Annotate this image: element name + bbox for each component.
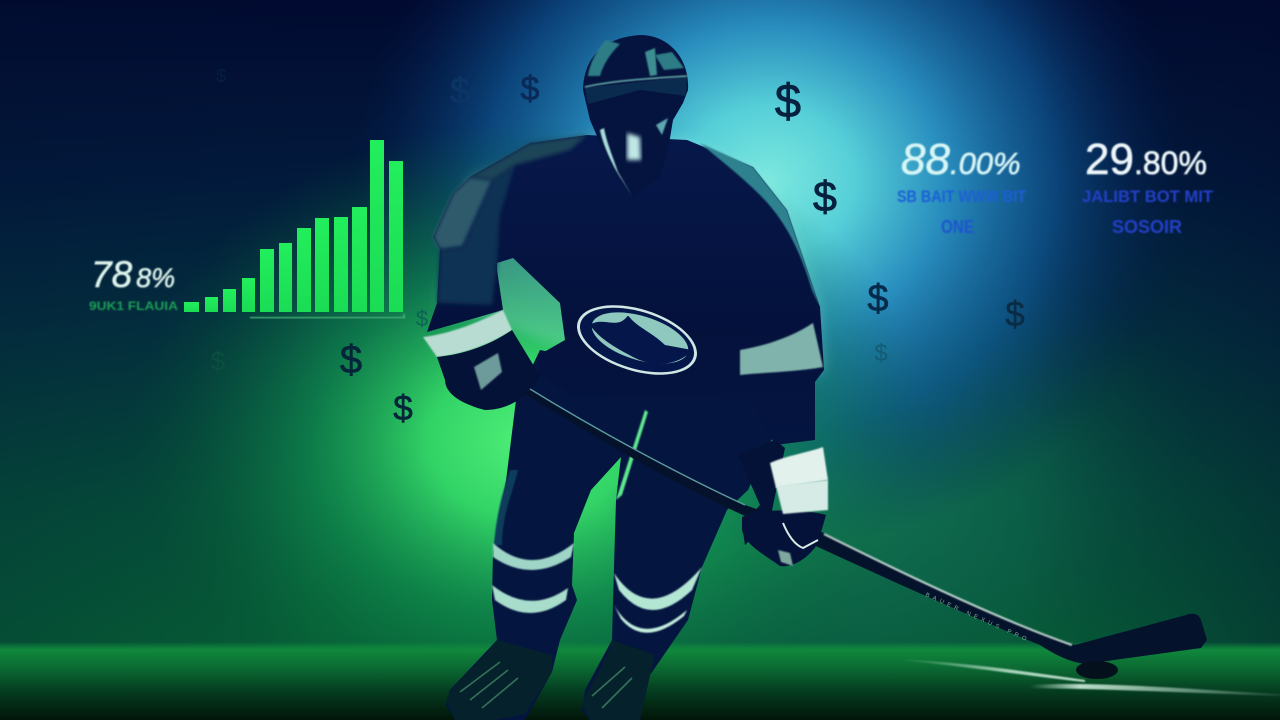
left sleeve highlight: [433, 177, 493, 250]
floating dollar signs: $: [775, 74, 801, 127]
right leg sock stripes: [614, 567, 702, 610]
right sleeve cuff stripe: [740, 323, 823, 375]
floating dollar signs: $: [450, 70, 470, 111]
shoulder strip: [470, 135, 587, 180]
right statistic: 88.00%: ONE: [941, 217, 974, 237]
jersey crest: [569, 292, 705, 388]
face highlights: [627, 133, 641, 160]
bar chart: rising green bars: [184, 140, 404, 318]
left leg sock stripes: [493, 543, 574, 570]
ice floor: [0, 642, 1280, 720]
hockey player: [423, 35, 825, 720]
hockey stick and puck: [525, 389, 1207, 679]
right statistic: 29.80%: JALIBT BOT MIT: [1082, 187, 1214, 206]
skates: [446, 640, 552, 720]
player legs: [446, 350, 790, 720]
left statistic: 9UK1 FLAUIA: [89, 299, 178, 313]
floating dollar signs: $: [340, 338, 362, 382]
right shoulder rim: [700, 143, 820, 307]
floating dollar signs: $: [211, 346, 226, 376]
hockey stick and puck: BAUER NEXUS PRO: [924, 592, 1027, 643]
right statistic: 88.00%: 88.00%: [901, 135, 1021, 184]
left statistic: [89, 254, 178, 313]
helmet and head: [583, 35, 688, 197]
floating dollar signs: $: [813, 173, 837, 221]
right statistic: 88.00%: [897, 135, 1027, 237]
floating dollar signs: $: [867, 278, 889, 320]
left arm shading: [437, 165, 515, 305]
right statistic: 29.80%: [1082, 135, 1214, 237]
left wrist cuff: [423, 310, 512, 357]
right glove: [738, 440, 828, 566]
left statistic: 788%: [91, 254, 175, 295]
floating dollar signs: $: [416, 306, 428, 331]
player upper-body rim glow: [437, 135, 825, 400]
right statistic: 88.00%: SB BAIT WWW BIT: [897, 187, 1027, 206]
puck: [1076, 661, 1118, 679]
floating dollar signs: $: [521, 70, 540, 108]
floating dollar signs: [211, 66, 1025, 428]
right statistic: 29.80%: SOSOIR: [1112, 217, 1182, 237]
player jersey: [427, 135, 824, 445]
floating dollar signs: $: [216, 66, 226, 86]
left glove: [437, 330, 540, 410]
right statistic: 29.80%: 29.80%: [1085, 135, 1207, 184]
leg highlight: [494, 470, 518, 545]
floating dollar signs: $: [1005, 295, 1025, 334]
floating dollar signs: $: [874, 340, 888, 367]
floating dollar signs: $: [393, 389, 413, 428]
green slit between legs: [616, 410, 648, 500]
